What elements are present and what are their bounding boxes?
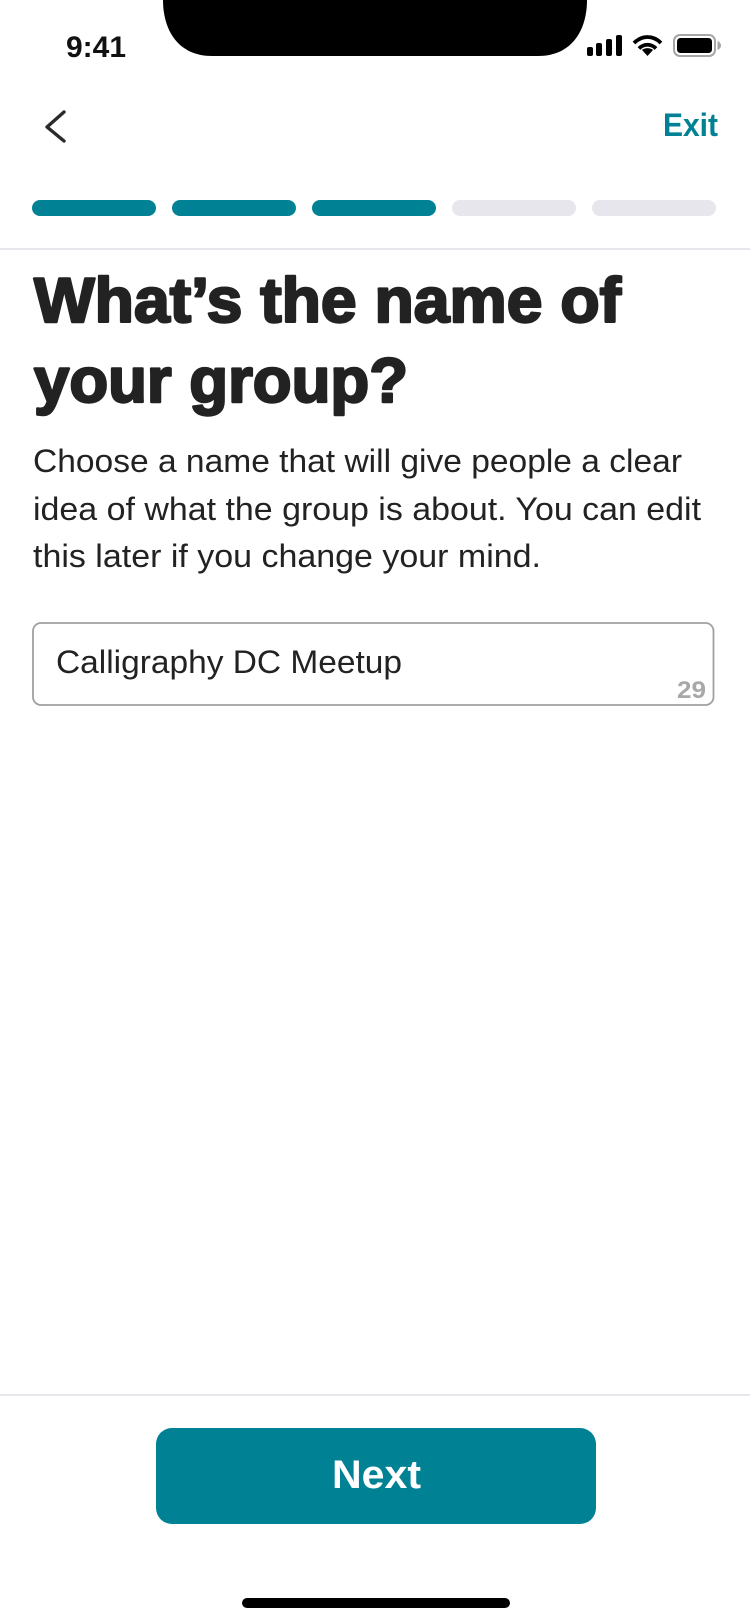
input value: Calligraphy DC Meetup [56,644,402,680]
status bar time: 9:41 [66,31,126,64]
description: idea of what the group is about. You can edit [33,491,701,527]
icon: battery [674,35,721,56]
exit link: Exit [663,107,718,143]
character count: 29 [677,677,706,704]
next button [156,1428,596,1524]
icon: cellular signal [587,35,622,56]
heading [34,266,622,416]
home indicator [242,1598,510,1608]
icon: back chevron [47,112,64,141]
name input [33,623,714,705]
description [33,443,701,574]
icon: wifi [634,37,661,56]
next button: Next [332,1453,421,1497]
notch [163,0,587,56]
heading: What’s the name of [34,266,622,336]
description: Choose a name that will give people a clear [33,443,682,479]
heading: your group? [34,346,408,416]
description: this later if you change your mind. [33,538,541,574]
progress bar [32,200,716,216]
